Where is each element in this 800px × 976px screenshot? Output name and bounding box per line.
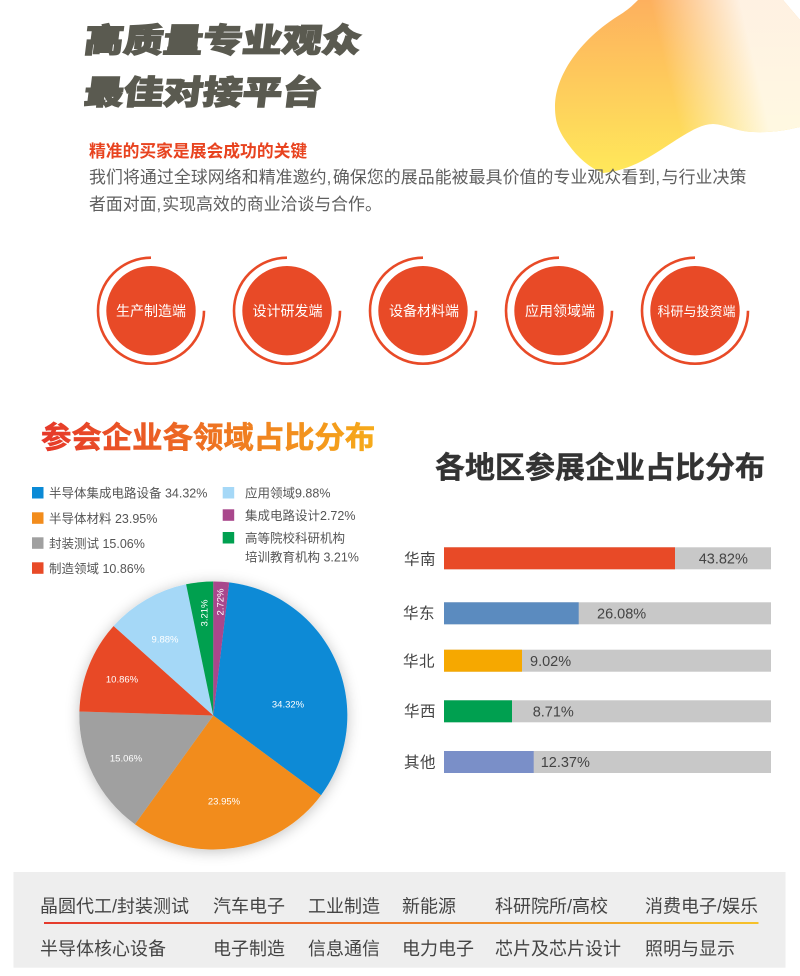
title	[82, 14, 365, 114]
body paragraph	[89, 168, 746, 214]
heading: sector distribution: 参会企业各领域占比分布	[41, 421, 375, 455]
footer top row: 消费电子/娱乐	[645, 896, 758, 916]
bar: 其他	[404, 751, 771, 773]
pie legend	[32, 486, 359, 576]
bar: 华南	[404, 547, 771, 569]
legend: 高等院校科研机构 培训教育机构: 高等院校科研机构	[245, 530, 345, 546]
body paragraph: 者面对面,实现高效的商业洽谈与合作。	[89, 195, 382, 214]
bar: 华东: 华东	[403, 604, 435, 622]
footer top row: 工业制造	[308, 896, 380, 916]
regional bar chart	[403, 547, 771, 773]
legend: 封装测试: 封装测试 15.06%	[49, 536, 145, 551]
legend: 半导体集成电路设备: 半导体集成电路设备 34.32%	[49, 486, 207, 500]
footer top row: 新能源	[402, 896, 456, 916]
bar: 华东	[403, 602, 771, 624]
bar: 其他: 12.37%	[541, 755, 590, 771]
bar: 华北	[403, 650, 771, 672]
legend: 高等院校科研机构 培训教育机构: 培训教育机构 3.21%	[245, 550, 359, 564]
intro text block	[89, 141, 746, 214]
footer bottom row: 照明与显示	[645, 939, 735, 959]
bar: 其他: 其他	[404, 754, 436, 772]
title: 高质量专业观众	[82, 14, 365, 62]
footer top row: 晶圆代工/封装测试	[40, 896, 189, 916]
bar: 华西: 华西	[404, 702, 436, 720]
footer bottom row: 芯片及芯片设计	[495, 939, 621, 959]
bar: 华南: 43.82%	[699, 552, 748, 568]
footer bottom row: 电子制造	[213, 939, 285, 959]
legend: 高等院校科研机构 培训教育机构	[223, 530, 359, 564]
circle: 应用领域端	[506, 258, 612, 364]
circle: 科研与投资端: 科研与投资端	[657, 304, 736, 319]
bar: 华南: 华南	[404, 550, 436, 568]
pie value labels: 23.95%	[208, 796, 241, 808]
footer top row: 科研院所/高校	[495, 896, 608, 916]
bar: 华西: 8.71%	[533, 704, 574, 720]
circle: 生产制造端	[98, 258, 204, 364]
pie value labels: 9.88%	[152, 634, 179, 646]
pie value labels: 10.86%	[106, 674, 139, 686]
pie chart	[79, 581, 347, 850]
red subheading: 精准的买家是展会成功的关键	[89, 141, 307, 161]
legend: 半导体材料: 半导体材料 23.95%	[49, 512, 157, 526]
footer bottom row	[40, 939, 735, 959]
circle: 应用领域端: 应用领域端	[525, 303, 595, 319]
bar: 华西	[404, 700, 771, 722]
footer bottom row: 电力电子	[402, 939, 474, 959]
body paragraph: 我们将通过全球网络和精准邀约,确保您的展品能被最具价值的专业观众看到,与行业决策	[89, 168, 746, 187]
bar: 华北: 9.02%	[530, 654, 571, 670]
footer bottom row: 信息通信	[308, 939, 380, 959]
footer bottom row: 半导体核心设备	[40, 939, 166, 959]
circle: 生产制造端: 生产制造端	[116, 303, 186, 319]
pie value labels: 3.21%	[200, 599, 210, 626]
circle: 设计研发端: 设计研发端	[252, 303, 322, 319]
pie value labels: 15.06%	[110, 754, 143, 764]
decorative gradient blob	[555, 0, 800, 173]
footer industries panel	[14, 872, 786, 968]
five audience circles	[98, 258, 748, 364]
footer top row: 汽车电子	[213, 896, 285, 916]
bar: 华北: 华北	[403, 652, 435, 670]
title: 最佳对接平台	[82, 66, 325, 114]
circle: 科研与投资端	[642, 258, 748, 364]
pie slices	[79, 581, 347, 850]
heading: regional distribution: 各地区参展企业占比分布	[435, 452, 765, 485]
legend: 制造领域: 制造领域 10.86%	[49, 562, 145, 576]
legend: 集成电路设计: 集成电路设计2.72%	[245, 508, 355, 523]
footer top row	[40, 896, 758, 916]
circle: 设备材料端	[370, 258, 476, 364]
pie value labels: 2.72%	[216, 588, 226, 615]
circle: 设计研发端	[234, 258, 340, 364]
pie value labels: 34.32%	[272, 700, 305, 710]
legend: 应用领域: 应用领域9.88%	[245, 486, 330, 500]
circle: 设备材料端: 设备材料端	[389, 303, 459, 319]
pie value labels	[106, 588, 305, 808]
bar: 华东: 26.08%	[597, 606, 646, 622]
